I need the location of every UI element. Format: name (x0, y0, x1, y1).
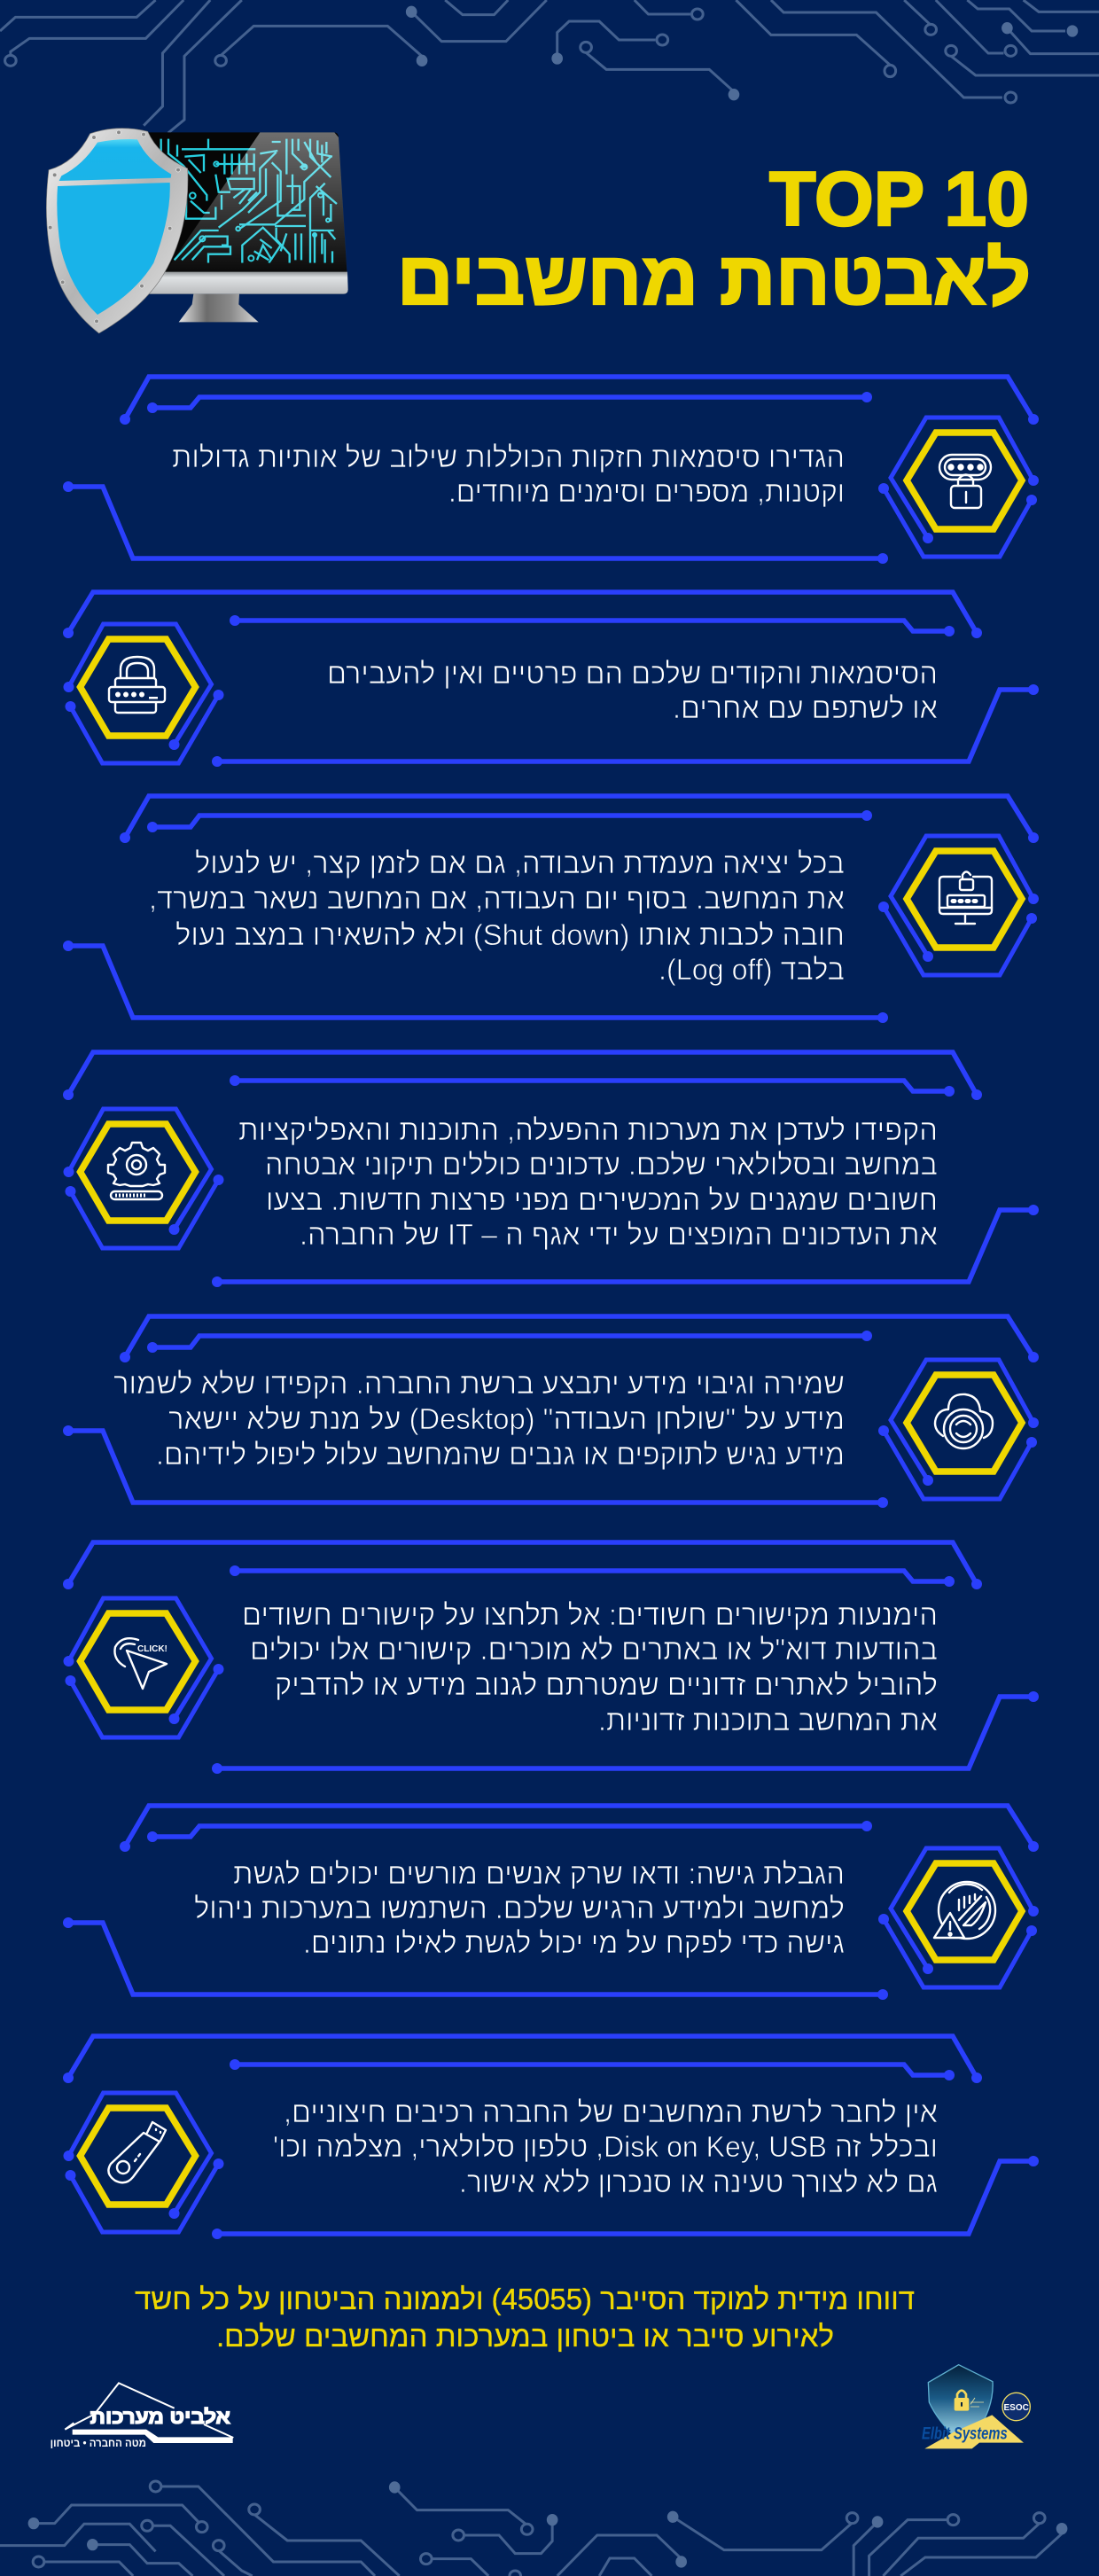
panel: tip 7 access control (63, 1806, 1039, 2000)
text: tip 2: הסיסמאות והקודים שלכם הם פרטיים ואין להעבירם (327, 657, 938, 690)
callout: report notice: דווחו מידית למוקד הסייבר (45055) ולממונה הביטחון על כל חשד (135, 2283, 915, 2315)
icon hexagon 3 (878, 836, 1039, 975)
icon: restricted access warning (934, 1882, 995, 1939)
title: TOP 10 (769, 157, 1029, 242)
shield (46, 129, 188, 333)
icon: click cursor: CLICK! (137, 1644, 168, 1654)
circuit pattern: bottom (0, 2481, 1067, 2576)
panel frame 1 (63, 377, 1039, 564)
panel: tip 5 data backup (63, 1316, 1039, 1508)
illustration: monitor with shield (46, 129, 348, 333)
panel frame 8 (63, 2036, 1039, 2239)
icon hexagon 8 (64, 2093, 223, 2232)
icon hexagon 5 (878, 1360, 1039, 1499)
panel: tip 8 external devices (63, 2036, 1039, 2239)
logo: Elbit Systems Hebrew: אלביט מערכות (90, 2406, 230, 2428)
icon hexagon 4 (64, 1109, 223, 1248)
text: tip 2: או לשתפם עם אחרים. (673, 691, 938, 724)
panel frame 7 (63, 1806, 1039, 2000)
logo: Elbit Systems Hebrew (51, 2383, 233, 2449)
icon: password padlock (939, 455, 991, 508)
text: tip 6: בהודעות דוא"ל או באתרים לא מוכרים. קישורים אלו יכולים (250, 1633, 938, 1666)
text: tip 6 (242, 1598, 938, 1737)
icon: usb stick (108, 2122, 166, 2182)
text: tip 8: ובכלל זה Disk on Key, USB, טלפון סלולארי, מצלמה וכו' (273, 2130, 938, 2163)
text: tip 1: וקטנות, מספרים וסימנים מיוחדים. (448, 475, 845, 508)
icon: padlock with code (109, 657, 165, 713)
text: tip 4: במחשב ובסלולארי שלכם. עדכונים כוללים תיקוני אבטחה (265, 1148, 938, 1181)
panel: tip 3 lock the computer (63, 796, 1039, 1023)
text: tip 1 (172, 441, 845, 508)
title: לאבטחת מחשבים (397, 237, 1031, 320)
text: tip 4: את העדכונים המופצים על ידי אגף ה – IT של החברה. (300, 1218, 938, 1251)
text: tip 3 (149, 847, 845, 986)
text: tip 8: גם לא לצורך טעינה או סנכרון ללא אישור. (459, 2166, 938, 2198)
text: tip 3: בכל יציאה מעמדת העבודה, גם אם לזמן קצר, יש לנעול (195, 847, 845, 879)
logo: Elbit Systems ESOC (922, 2365, 1030, 2448)
panel frame 4 (63, 1052, 1039, 1287)
panel frame 2 (63, 592, 1039, 767)
title (397, 157, 1031, 320)
panel: tip 1 strong passwords (63, 377, 1039, 564)
text: tip 3: חובה לכבות אותו (Shut down) ולא להשאירו במצב נעול (175, 918, 845, 951)
panel frame 3 (63, 796, 1039, 1023)
text: tip 4: הקפידו לעדכן את מערכות ההפעלה, התוכנות והאפליקציות (238, 1113, 938, 1146)
text: tip 7: הגבלת גישה: ודאו שרק אנשים מורשים יכולים לגשת (233, 1857, 845, 1890)
callout: report notice: לאירוע סייבר או ביטחון במערכות המחשבים שלכם. (216, 2320, 834, 2353)
panel frame 6 (63, 1542, 1039, 1774)
logo: Elbit Systems Hebrew: מטה החברה • ביטחון (51, 2437, 146, 2449)
panel: tip 6 suspicious links (63, 1542, 1039, 1774)
icon hexagon 6 (64, 1598, 223, 1737)
panel frame 5 (63, 1316, 1039, 1508)
text: tip 8 (273, 2096, 938, 2198)
text: tip 5: שמירה וגיבוי מידע יתבצע ברשת החברה. הקפידו שלא לשמור (113, 1367, 845, 1400)
icon hexagon 7 (878, 1848, 1039, 1987)
panel: tip 2 private passwords (63, 592, 1039, 767)
text: tip 3: בלבד (Log off). (659, 953, 845, 986)
circuit pattern: top (0, 0, 1099, 133)
text: tip 7: למחשב ולמידע הרגיש שלכם. השתמשו במערכות ניהול (194, 1892, 845, 1924)
text: tip 5 (113, 1367, 845, 1471)
callout: report notice (135, 2283, 915, 2353)
icon hexagon 2 (64, 624, 223, 763)
text: tip 5: מידע על "שולחן העבודה" (Desktop) על מנת שלא יישאר (168, 1402, 845, 1435)
logo: Elbit Systems ESOC: Elbit Systems (922, 2425, 1008, 2444)
text: tip 4 (238, 1113, 938, 1251)
icon: click cursor (114, 1638, 168, 1689)
icon hexagon 1 (878, 418, 1039, 557)
text: tip 6: את המחשב בתוכנות זדוניות. (598, 1704, 938, 1737)
text: tip 7: גישה כדי לפקח על מי יכול לגשת לאילו נתונים. (303, 1926, 845, 1959)
text: tip 4: חשובים שמגנים על המכשירים מפני פרצות חדשות. בצעו (266, 1183, 938, 1216)
panel: tip 4 updates (63, 1052, 1039, 1287)
icon: gear with progress bar (108, 1143, 165, 1199)
text: tip 8: אין לחבר לרשת המחשבים של החברה רכיבים חיצוניים, (284, 2096, 938, 2128)
text: tip 5: מידע נגיש לתוקפים או גנבים שהמחשב עלול ליפול לידיהם. (156, 1438, 845, 1471)
text: tip 6: הימנעות מקישורים חשודים: אל תלחצו על קישורים חשודים (242, 1598, 938, 1631)
icon: monitor with open lock (939, 872, 992, 924)
text: tip 3: את המחשב. בסוף יום העבודה, אם המחשב נשאר במשרד, (149, 882, 845, 915)
icon: cloud sync (935, 1394, 993, 1448)
text: tip 1: הגדירו סיסמאות חזקות הכוללות שילוב של אותיות גדולות (172, 441, 845, 473)
text: tip 7 (194, 1857, 845, 1959)
monitor (148, 132, 348, 322)
logo: Elbit Systems ESOC: ESOC (1004, 2403, 1029, 2413)
text: tip 2 (327, 657, 938, 724)
text: tip 6: להוביל לאתרים זדוניים שמטרתם לגנוב מידע או להדביק (275, 1668, 938, 1701)
